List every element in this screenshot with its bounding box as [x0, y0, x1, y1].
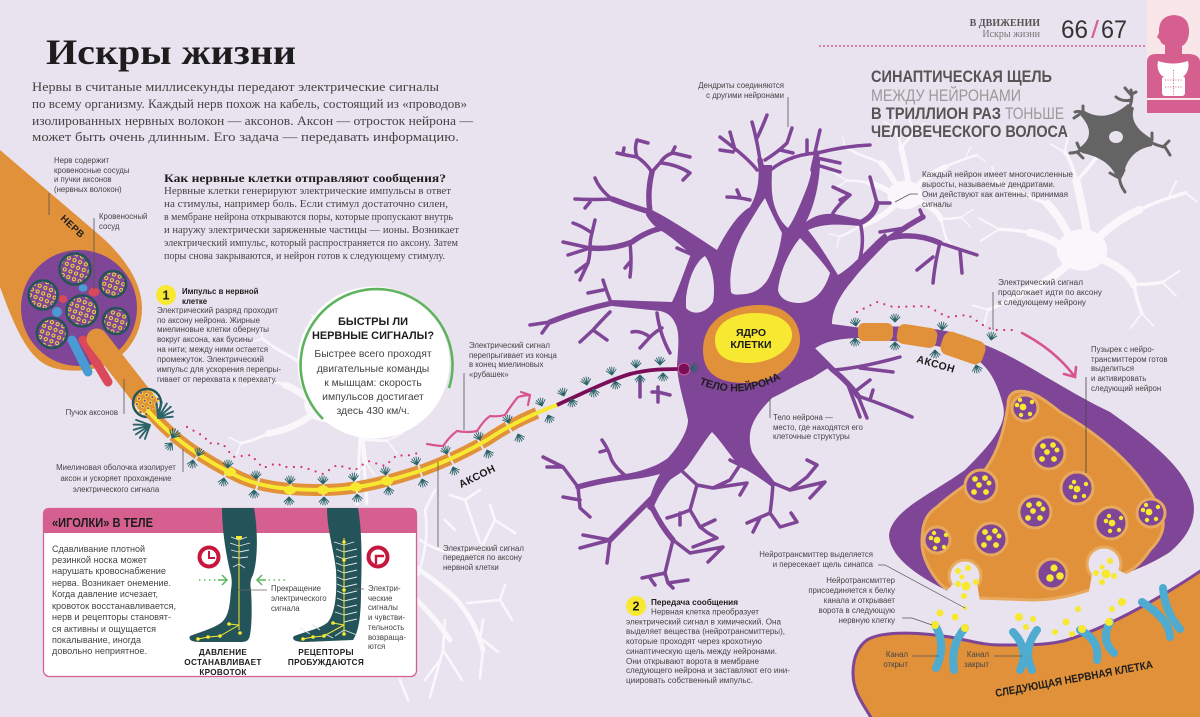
annotation: many dendrites: выросты, называемые дендритами. — [922, 180, 1055, 189]
panel text: Сдавливание плотной — [52, 544, 145, 554]
annotation: vesicle ready: Пузырек с нейро- — [1091, 345, 1155, 354]
annotation: vesicle ready: трансмиттером готов — [1091, 355, 1168, 364]
panel: pins and needles — [43, 508, 417, 677]
panel text: резинкой носка может — [52, 555, 148, 565]
callout: fast nerve signals: БЫСТРЫ ЛИ — [338, 316, 408, 328]
annotation: blood vessel: Кровеносный — [99, 212, 147, 221]
annotation: neuron body: клеточные структуры — [773, 432, 850, 441]
leg 2 — [293, 508, 362, 642]
cell nucleus: ЯДРО — [736, 327, 766, 339]
big fact text: synaptic cleft: МЕЖДУ НЕЙРОНАМИ — [871, 86, 1021, 105]
annotation: neurotransmitter binds: нервную клетку — [839, 616, 895, 625]
synaptic notches — [940, 547, 1134, 602]
caption: receptors wake up: РЕЦЕПТОРЫ — [298, 648, 354, 657]
annotation: signal continues: продолжает идти по аксону — [998, 288, 1102, 297]
header: section and page numbers — [820, 16, 1146, 46]
step 1: impulse in nerve cell: гивает от перехвата к перехвату. — [157, 375, 277, 384]
section body text: и наружу электрически заряженные частицы — ионы. Возникает — [164, 225, 459, 236]
label: nerve: НЕРВ — [58, 213, 86, 241]
annotation: signal stops: Прекращение — [271, 584, 321, 593]
vesicles — [924, 395, 1165, 589]
annotation: vesicle ready — [1086, 345, 1168, 473]
panel text: довольно неприятное. — [52, 646, 147, 656]
neuron dendrites and soma — [530, 115, 977, 588]
nerve cross-section — [0, 150, 161, 417]
callout: fast nerve signals: импульсов достигает — [322, 392, 424, 403]
caption: pressure stops blood flow: КРОВОТОК — [199, 668, 247, 677]
myelin segments — [150, 412, 537, 490]
step 2: passing the message: циировать собственный импульс. — [626, 676, 753, 685]
pink arrow to synapse — [1022, 333, 1076, 377]
big fact text: synaptic cleft: ЧЕЛОВЕЧЕСКОГО ВОЛОСА — [871, 123, 1068, 141]
pink zigzag arrow: signal jumps — [427, 392, 530, 446]
intro text — [32, 80, 473, 144]
step 1: impulse in nerve cell: по аксону нейрона. Жирные — [157, 316, 260, 325]
callout: fast nerve signals — [298, 286, 453, 438]
step 2: passing the message: Они открывают ворота в мембране — [626, 657, 759, 666]
icon: clock 2 — [368, 548, 388, 566]
annotation: signal continues: Электрический сигнал — [998, 278, 1083, 287]
annotation: axon bundle — [66, 379, 124, 417]
arrow: compression right — [257, 575, 285, 585]
annotation: dendrites connect: Дендриты соединяются — [698, 81, 784, 90]
callout: fast nerve signals: здесь 430 км/ч. — [337, 406, 409, 417]
title: Искры жизни — [46, 32, 296, 72]
step 1: impulse in nerve cell: импульс для ускорения перепры- — [157, 365, 281, 374]
leg 1 — [189, 508, 257, 642]
soma and trunks — [612, 160, 890, 512]
step 2: passing the message: следующего нейрона и заставляют его ини- — [626, 666, 790, 675]
caption: receptors wake up — [288, 648, 364, 667]
annotation: nerve contents: Нерв содержит — [54, 156, 110, 165]
step 1: impulse in nerve cell: Импульс в нервной — [182, 287, 259, 296]
annotation: vesicle ready: следующий нейрон — [1091, 384, 1161, 393]
intro text: изолированных нервных волокон — аксонов. Аксон — отросток нейрона — — [32, 114, 473, 128]
section body text: в мембране нейрона открываются поры, которые пропускают внутрь — [164, 212, 453, 223]
annotation: signals return: и чувстви- — [368, 613, 406, 622]
panel text: кровоток восстанавливается, — [52, 601, 176, 611]
panel header — [43, 508, 417, 533]
step 2: passing the message: 2 — [633, 600, 640, 614]
step 2: passing the message: электрический сигнал в химический. Она — [626, 618, 782, 626]
annotation: nerve contents: кровеносные сосуды — [54, 166, 130, 175]
annotation: channel closed: Канал — [967, 650, 989, 659]
dendrite branches, fine — [530, 140, 750, 402]
callout: fast nerve signals: Быстрее всего проходят — [314, 349, 432, 360]
callout: fast nerve signals: НЕРВНЫЕ СИГНАЛЫ? — [312, 330, 434, 342]
orange terminal — [922, 391, 1163, 600]
step 1: impulse in nerve cell — [156, 285, 281, 384]
icon: clock 1 — [200, 548, 218, 566]
annotation: channel open — [883, 650, 939, 669]
section body text: электрический импульс, который распространяется по аксону. Затем — [164, 238, 458, 249]
header: section and page numbers: В ДВИЖЕНИИ — [970, 18, 1040, 29]
cell nucleus — [703, 305, 800, 383]
label: axon on long fibre: АКСОН — [457, 463, 498, 491]
panel text — [52, 544, 176, 656]
header: section and page numbers: / — [1091, 16, 1099, 44]
annotation: channel closed: закрыт — [964, 660, 989, 669]
annotation: signals return — [353, 584, 406, 651]
axon with myelin sheath — [147, 369, 682, 490]
annotation: vesicle ready: выделиться — [1091, 364, 1134, 373]
big fact text: synaptic cleft — [871, 68, 1068, 141]
panel text: Когда давление исчезает, — [52, 589, 158, 599]
caption: pressure stops blood flow: ОСТАНАВЛИВАЕТ — [184, 658, 262, 667]
section body text — [164, 186, 459, 262]
annotation: signals return: тельность — [368, 623, 404, 632]
annotation: signal along axon: передается по аксону — [443, 553, 522, 562]
header: section and page numbers: Искры жизни — [982, 29, 1041, 40]
annotation: nerve contents: (нервных волокон) — [54, 185, 122, 194]
caption: pressure stops blood flow — [184, 648, 262, 677]
neurotransmitter molecules in cleft — [931, 558, 1126, 637]
axon terminal button — [678, 363, 690, 375]
annotation: signal along axon: нервной клетки — [443, 563, 499, 572]
step 1: impulse in nerve cell: 1 — [163, 288, 170, 302]
annotation: myelin sheath: Миелиновая оболочка изолирует — [56, 463, 176, 472]
annotation: signals return: возвраща- — [368, 633, 406, 642]
annotation: many dendrites: сигналы — [922, 200, 952, 209]
annotation: signal jumps: Электрический сигнал — [469, 341, 550, 350]
next nerve cell: СЛЕДУЮЩАЯ НЕРВНАЯ КЛЕТКА — [994, 659, 1154, 700]
annotation: blood vessel: сосуд — [99, 222, 120, 231]
annotation: signals return: Электри- — [368, 584, 401, 593]
single axon bundle — [97, 339, 147, 403]
step 1: impulse in nerve cell: промежуток. Электрический — [157, 355, 264, 364]
orange axon myelin segments — [858, 323, 988, 367]
intro text: может быть очень длинным. Его задача — передавать информацию. — [32, 130, 459, 144]
annotation: neurotransmitter released: и пересекает щель синапса — [773, 560, 874, 569]
annotation: blood vessel — [94, 212, 147, 290]
annotation: neurotransmitter binds: канала и открывает — [824, 596, 895, 605]
step 2: passing the message: выделяет вещества (нейротрансмиттеры), — [626, 627, 785, 636]
annotation: signal jumps — [464, 341, 558, 430]
annotation: neurotransmitter binds: Нейротрансмиттер — [826, 576, 896, 585]
section body text: Нервные клетки генерируют электрические импульсы в ответ — [164, 186, 451, 197]
section body text: на стимулы, например боль. Если стимул достаточно силен, — [164, 199, 448, 210]
annotation: neurotransmitter released — [759, 550, 965, 608]
annotation: signal along axon: Электрический сигнал — [443, 544, 524, 553]
icon: small grey neuron — [1070, 88, 1170, 192]
step 2: passing the message: Передача сообщения — [651, 598, 738, 607]
panel text: нарушать кровоснабжение — [52, 566, 166, 576]
section heading: how nerve cells send messages: Как нервные клетки отправляют сообщения? — [164, 171, 446, 185]
axon terminal section — [557, 369, 682, 405]
annotation: axon bundle: Пучок аксонов — [66, 408, 118, 417]
panel body — [44, 508, 416, 676]
arrow: compression left — [199, 575, 227, 585]
label: neuron body: ТЕЛО НЕЙРОНА — [701, 374, 781, 392]
dotted signal paths — [187, 302, 1017, 474]
header: section and page numbers: 66 — [1061, 16, 1088, 44]
step 2: passing the message: которые проходят через крохотную — [626, 637, 762, 646]
spaces between trunks — [686, 198, 830, 313]
electric impulse core — [147, 405, 557, 490]
caption: pressure stops blood flow: ДАВЛЕНИЕ — [199, 648, 247, 657]
annotation: signal jumps: «рубашек» — [469, 370, 509, 379]
step 1: impulse in nerve cell: вокруг аксона, как бусины — [157, 335, 253, 344]
annotation: neuron body — [770, 397, 863, 441]
annotation: channel open: открыт — [883, 660, 908, 669]
big fact text: synaptic cleft: В ТРИЛЛИОН РАЗ — [871, 105, 1001, 123]
annotation: nerve contents — [49, 156, 130, 215]
panel text: нерва. Возникает онемение. — [52, 578, 171, 588]
annotation: signal jumps: в конец миелиновых — [469, 360, 544, 369]
cell nucleus: КЛЕТКИ — [730, 339, 772, 351]
annotation: dendrites connect: с другими нейронами — [706, 91, 784, 100]
caption: receptors wake up: ПРОБУЖДАЮТСЯ — [288, 658, 364, 667]
icon: human torso — [1147, 0, 1200, 113]
step 2: passing the message: синаптическую щель между нейронами. — [626, 647, 777, 656]
annotation: signal stops — [238, 584, 327, 613]
annotation: myelin sheath: электрического сигнала — [73, 485, 160, 494]
dendrite branches, medium — [550, 153, 940, 540]
header: section and page numbers: 67 — [1101, 16, 1127, 44]
blood vessels — [52, 284, 108, 382]
annotation: many dendrites: Каждый нейрон имеет многочисленные — [922, 170, 1073, 179]
annotation: dendrites connect — [698, 81, 788, 127]
annotation: neuron body: Тело нейрона — — [773, 413, 833, 422]
annotation: signals return: ческие — [368, 594, 392, 603]
annotation: neurotransmitter binds: ворота в следующую — [819, 606, 895, 615]
annotation: signal continues: к следующему нейрону — [998, 298, 1086, 307]
annotation: signal jumps: перепрыгивает из конца — [469, 351, 558, 360]
annotation: channel open: Канал — [886, 650, 908, 659]
intro text: Нервы в считаные миллисекунды передают электрические сигналы — [32, 80, 439, 94]
synapse terminal — [858, 323, 1194, 602]
big fact text: synaptic cleft: СИНАПТИЧЕСКАЯ ЩЕЛЬ — [871, 68, 1052, 86]
dendritic tufts along axon — [130, 314, 997, 505]
panel text: нерв и рецепторы становят- — [52, 612, 171, 622]
annotation: signal stops: сигнала — [271, 604, 300, 613]
step 2: passing the message — [626, 596, 790, 685]
annotation: neurotransmitter binds: присоединяется к белку — [808, 586, 895, 595]
panel title: «ИГОЛКИ» В ТЕЛЕ — [52, 516, 153, 530]
big fact text: synaptic cleft: ТОНЬШЕ — [1005, 105, 1064, 123]
annotation: neurotransmitter released: Нейротрансмиттер выделяется — [759, 550, 873, 559]
annotation: signal along axon — [438, 462, 524, 572]
neurotransmitter in vesicles — [929, 398, 1160, 582]
receptors / ion channels — [935, 588, 1180, 670]
nerve interior — [21, 250, 137, 366]
annotation: vesicle ready: и активировать — [1091, 374, 1146, 383]
purple axon end and bulb — [860, 327, 1194, 592]
ghost neurons in background — [227, 115, 1197, 700]
callout: fast nerve signals: к мышцам: скорость — [324, 378, 422, 389]
next nerve cell — [853, 570, 1200, 717]
step 1: impulse in nerve cell: Электрический разряд проходит — [157, 306, 278, 315]
annotation: signals return: сигналы — [368, 603, 398, 612]
step 1: impulse in nerve cell: на нити; между ними остается — [157, 345, 268, 354]
axon bundles — [28, 254, 129, 348]
annotation: neuron body: место, где находятся его — [773, 423, 863, 432]
annotation: signals return: ются — [368, 642, 385, 651]
panel text: покалывание, иногда — [52, 635, 142, 645]
step 2: passing the message: Нервная клетка преобразует — [651, 608, 759, 616]
annotation: many dendrites — [895, 170, 1073, 209]
annotation: signal continues — [993, 278, 1102, 330]
yellow nodes on axon — [224, 468, 393, 494]
label: axon near terminal: АКСОН — [915, 353, 956, 376]
section body text: поры снова закрываются, и нейрон готов к следующему стимулу. — [164, 251, 445, 262]
intro text: по всему организму. Каждый нерв похож на кабель, состоящий из «проводов» — [32, 97, 467, 111]
annotation: many dendrites: Они действуют как антенны, принимая — [922, 190, 1068, 199]
annotation: myelin sheath: аксон и ускоряет прохождение — [61, 474, 171, 483]
step 1: impulse in nerve cell: клетке — [182, 297, 208, 306]
annotation: myelin sheath — [56, 449, 183, 494]
annotation: neurotransmitter binds — [808, 576, 932, 625]
nerve body — [0, 150, 142, 371]
bundle cut end — [133, 389, 161, 417]
label path: neuron body — [699, 376, 786, 391]
step 1: impulse in nerve cell: миелиновые клетки обернуты — [157, 325, 269, 334]
panel text: ся активны и ощущается — [52, 624, 156, 634]
annotation: channel closed — [964, 650, 1022, 669]
callout: fast nerve signals: двигательные команды — [317, 364, 429, 375]
annotation: signal stops: электрического — [271, 594, 327, 603]
annotation: nerve contents: и пучки аксонов — [54, 175, 112, 184]
